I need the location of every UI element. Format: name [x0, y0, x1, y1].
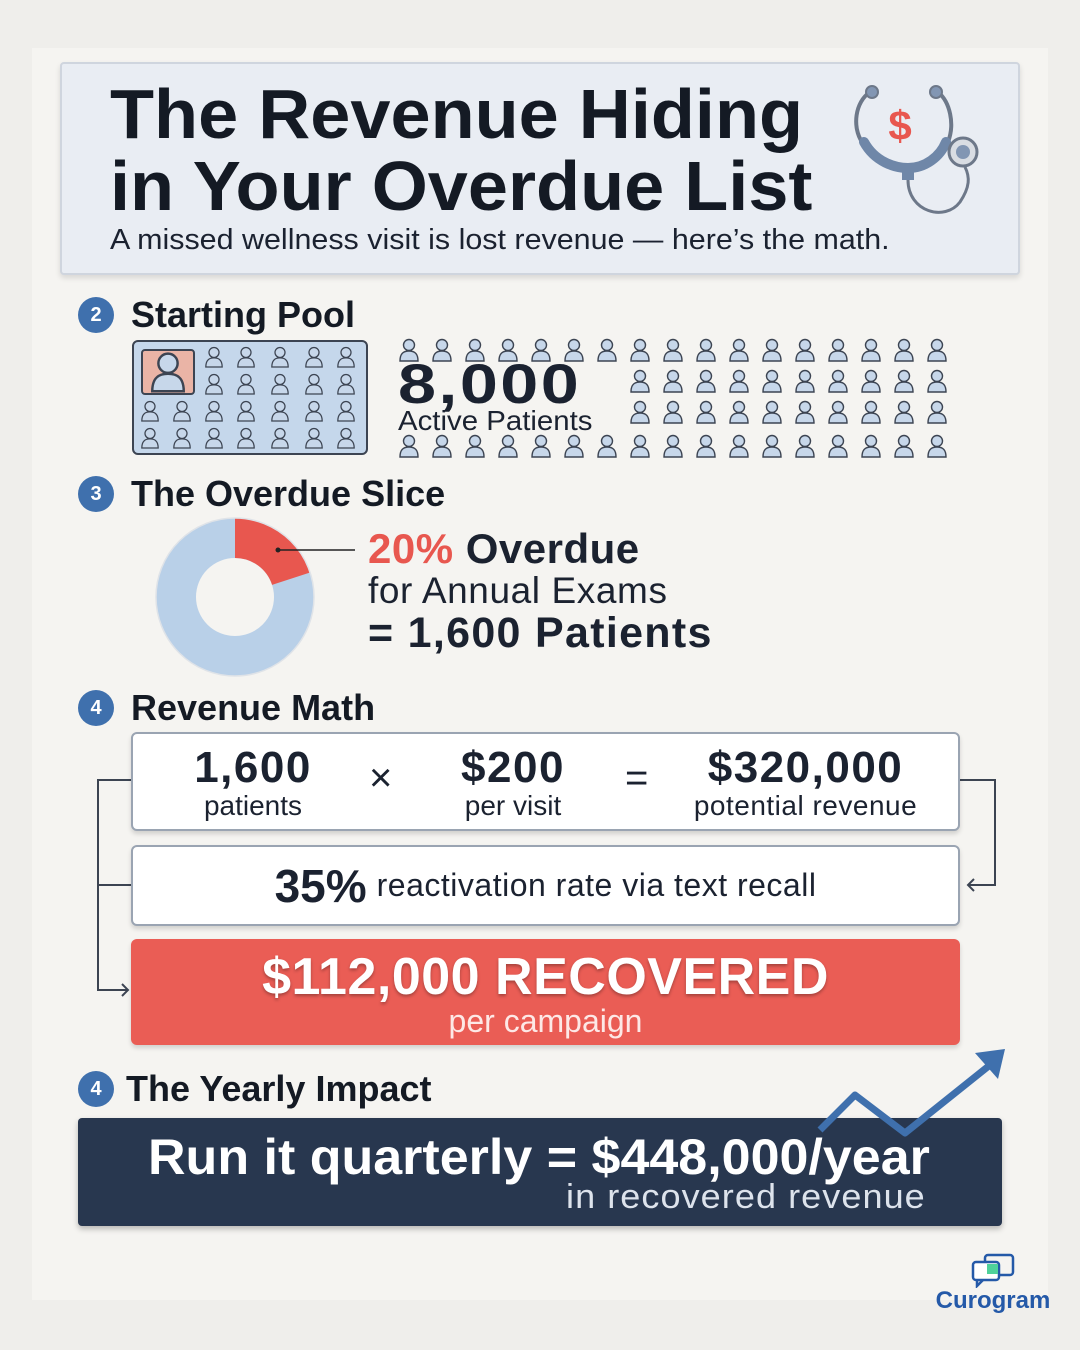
section 3 heading: 3 — [90, 482, 102, 504]
yearly impact bar: Run it quarterly = $448,000/year — [148, 1129, 930, 1185]
equation box: potential revenue — [694, 790, 917, 821]
yearly impact bar — [78, 1118, 1002, 1226]
reactivation rate box: reactivation rate via text recall — [377, 867, 816, 903]
equation box: patients — [204, 790, 302, 821]
recovered banner: $112,000 RECOVERED — [262, 948, 829, 1006]
equation box — [131, 732, 960, 831]
section 4 heading: 4 — [90, 696, 102, 718]
equation box: per visit — [465, 790, 561, 821]
stat: 8,000 active patients: 8,000 — [398, 352, 581, 415]
icon: stethoscope — [854, 85, 978, 214]
callout: overdue stats: 20% Overdue — [368, 525, 640, 572]
recovered banner: per campaign — [449, 1003, 642, 1039]
section 5 heading: The Yearly Impact — [126, 1068, 432, 1109]
section 4 heading: Revenue Math — [131, 687, 375, 728]
title: The Revenue Hiding — [110, 75, 803, 153]
donut chart — [155, 517, 355, 677]
patient grid panel — [132, 340, 368, 455]
equation box: $200 — [461, 743, 565, 792]
equation box: × — [369, 756, 392, 800]
callout: overdue stats: = 1,600 Patients — [368, 609, 713, 657]
logo: Curogram: Curogram — [936, 1287, 1050, 1314]
recovered banner — [131, 939, 960, 1045]
logo: Curogram — [936, 1254, 1050, 1314]
arrow: growth trend — [818, 1049, 1005, 1137]
callout: overdue stats — [368, 525, 713, 657]
stat: 8,000 active patients: Active Patients — [398, 405, 592, 436]
yearly impact bar: in recovered revenue — [566, 1178, 926, 1216]
reactivation rate box — [131, 845, 960, 926]
header card — [60, 62, 1020, 275]
title: in Your Overdue List — [110, 147, 812, 225]
equation box: = — [625, 756, 648, 800]
section 3 heading: The Overdue Slice — [131, 473, 445, 514]
subtitle: A missed wellness visit is lost revenue — here’s the math. — [110, 224, 890, 256]
callout: overdue stats: for Annual Exams — [368, 570, 668, 611]
connectors — [97, 779, 996, 997]
equation box: $320,000 — [708, 743, 903, 792]
section 2 heading: Starting Pool — [131, 294, 355, 335]
section 5 heading: 4 — [90, 1078, 102, 1100]
patient icon crowd — [399, 338, 947, 458]
equation box: 1,600 — [194, 743, 312, 792]
title — [110, 75, 812, 225]
icon: stethoscope: $ — [888, 102, 912, 149]
section 2 heading: 2 — [90, 304, 102, 326]
icon: doctor — [141, 349, 195, 395]
reactivation rate box: 35% — [275, 860, 367, 912]
